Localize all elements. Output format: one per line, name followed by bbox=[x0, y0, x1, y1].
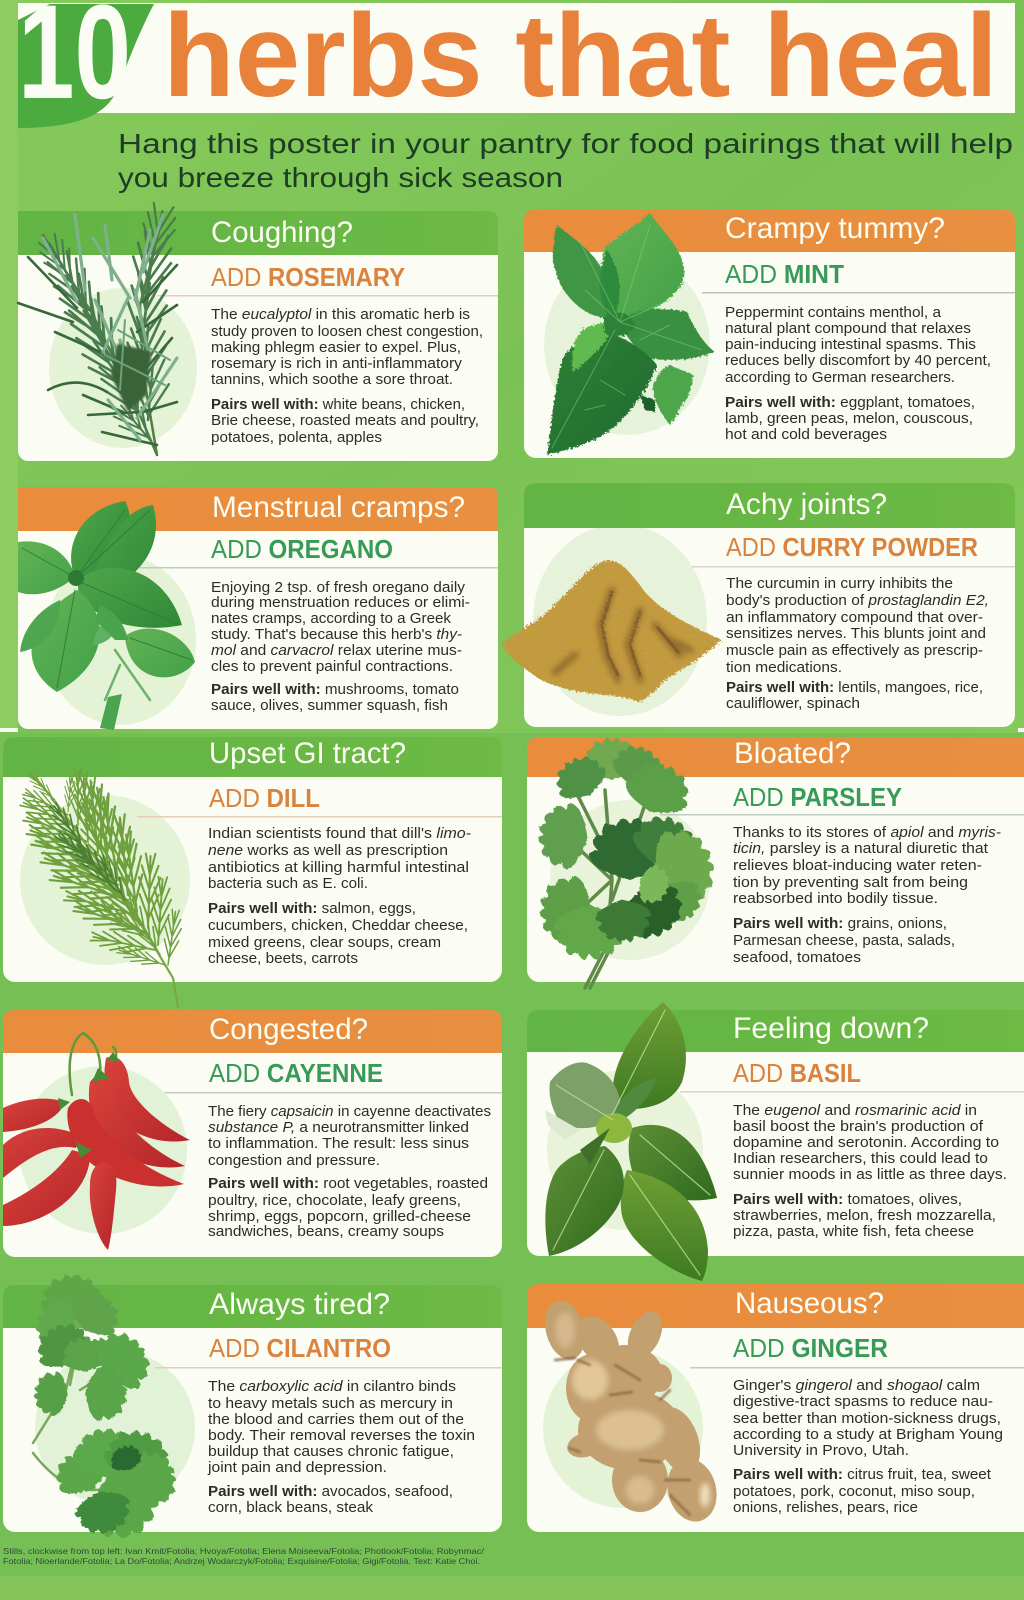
heading: Achy joints? bbox=[726, 488, 887, 521]
header bar bbox=[18, 211, 498, 255]
text block bbox=[733, 825, 1001, 966]
text block: mixed greens, clear soups, cream bbox=[208, 935, 441, 951]
text block: seafood, tomatoes bbox=[733, 950, 861, 966]
text block: making phlegm easier to expel. Plus, bbox=[211, 340, 461, 356]
remedy name: ADD CAYENNE bbox=[209, 1058, 383, 1088]
text block bbox=[733, 1378, 1003, 1516]
text block: cles to prevent painful contractions. bbox=[211, 659, 453, 675]
text block: University in Provo, Utah. bbox=[733, 1443, 909, 1459]
text block bbox=[208, 826, 471, 967]
text block: The curcumin in curry inhibits the bbox=[726, 576, 953, 592]
text block: cauliflower, spinach bbox=[726, 696, 860, 712]
herb image: basil bbox=[545, 1002, 717, 1281]
text block: congestion and pressure. bbox=[208, 1153, 380, 1169]
text block: Parmesan cheese, pasta, salads, bbox=[733, 933, 955, 949]
herb image: curry powder bbox=[502, 561, 722, 702]
text block: reduces belly discomfort by 40 percent, bbox=[725, 353, 991, 369]
header bar bbox=[18, 487, 498, 531]
header bar bbox=[527, 737, 1024, 777]
text block: Enjoying 2 tsp. of fresh oregano daily bbox=[211, 580, 466, 596]
text block: study. That's because this herb's thy- bbox=[211, 627, 462, 643]
text block: the blood and carries them out of the bbox=[208, 1412, 464, 1428]
text block: mol and carvacrol relax uterine mus- bbox=[211, 643, 462, 659]
text block: pain-inducing intestinal spasms. This bbox=[725, 337, 976, 353]
text block: body's production of prostaglandin E2, bbox=[726, 593, 989, 609]
panel: always tired cilantro bbox=[3, 1275, 502, 1550]
text block: ticin, parsley is a natural diuretic that bbox=[733, 841, 988, 857]
panel: achy joints curry powder bbox=[502, 483, 1015, 727]
text block: corn, black beans, steak bbox=[208, 1500, 374, 1516]
text block: buildup that causes chronic fatigue, bbox=[208, 1444, 454, 1460]
text block: Pairs well with: eggplant, tomatoes, bbox=[725, 395, 975, 411]
text block: Pairs well with: lentils, mangoes, rice, bbox=[726, 680, 983, 696]
panel: feeling down basil bbox=[527, 1002, 1024, 1281]
text block: tion by preventing salt from being bbox=[733, 875, 968, 891]
text block: Pairs well with: tomatoes, olives, bbox=[733, 1192, 962, 1208]
text block: Pairs well with: grains, onions, bbox=[733, 916, 947, 932]
header bar bbox=[524, 483, 1015, 528]
text block: tion medications. bbox=[726, 660, 842, 676]
subtitle bbox=[118, 128, 1013, 193]
text block: according to a study at Brigham Young bbox=[733, 1427, 1003, 1443]
remedy name: ADD BASIL bbox=[733, 1058, 861, 1088]
text block: substance P, a neurotransmitter linked bbox=[208, 1120, 469, 1136]
text block: study proven to loosen chest congestion, bbox=[211, 324, 483, 340]
text block: tannins, which soothe a sore throat. bbox=[211, 372, 453, 388]
text block: The eugenol and rosmarinic acid in bbox=[733, 1103, 977, 1119]
text block bbox=[207, 1379, 475, 1516]
text block: Pairs well with: root vegetables, roasted bbox=[208, 1176, 488, 1192]
remedy name: ADD ROSEMARY bbox=[211, 262, 405, 292]
text block: bacteria such as E. coli. bbox=[208, 876, 368, 892]
text block bbox=[725, 305, 991, 443]
header bar bbox=[527, 1284, 1024, 1328]
remedy name: ADD CURRY POWDER bbox=[726, 532, 978, 562]
heading: Feeling down? bbox=[733, 1012, 929, 1045]
text block bbox=[211, 580, 470, 714]
herb image: cayenne peppers bbox=[3, 1033, 190, 1250]
text block: joint pain and depression. bbox=[207, 1460, 387, 1476]
panel: bloated parsley bbox=[527, 737, 1024, 988]
remedy name: ADD OREGANO bbox=[211, 534, 393, 564]
text block: Pairs well with: salmon, eggs, bbox=[208, 901, 416, 917]
text block: onions, relishes, pears, rice bbox=[733, 1500, 918, 1516]
panel: upset GI tract dill bbox=[3, 737, 502, 1007]
photo credits: Fotolia; Nioerlande/Fotolia; La Do/Fotolia; Andrzej Wodarczyk/Fotolia; Exquisine/Fotolia; Gigi/Fotolia. Text: Katie Choi. bbox=[3, 1556, 480, 1566]
text block: Pairs well with: mushrooms, tomato bbox=[211, 682, 459, 698]
heading: Congested? bbox=[209, 1013, 368, 1046]
text block: to heavy metals such as mercury in bbox=[208, 1396, 453, 1412]
text block: antibiotics at killing harmful intestinal bbox=[208, 860, 469, 876]
herb image: oregano bbox=[18, 501, 195, 730]
text block: during menstruation reduces or elimi- bbox=[211, 595, 470, 611]
panel: coughing rosemary bbox=[18, 202, 498, 461]
text block bbox=[726, 576, 989, 712]
text block: Indian scientists found that dill's limo- bbox=[208, 826, 471, 842]
text block: relieves bloat-inducing water reten- bbox=[733, 858, 982, 874]
text block: natural plant compound that relaxes bbox=[725, 321, 971, 337]
header bar bbox=[3, 1010, 502, 1053]
text block: lamb, green peas, melon, couscous, bbox=[725, 411, 973, 427]
text block: potatoes, pork, coconut, miso soup, bbox=[733, 1484, 975, 1500]
panel: nauseous ginger bbox=[527, 1284, 1024, 1532]
herb image: cilantro bbox=[28, 1275, 181, 1550]
text block bbox=[733, 1103, 1007, 1240]
heading: Coughing? bbox=[211, 216, 353, 249]
text block bbox=[208, 1104, 491, 1240]
header bar bbox=[3, 737, 502, 777]
herb image: dill bbox=[18, 769, 184, 1007]
text block: potatoes, polenta, apples bbox=[211, 430, 382, 446]
text block: sunnier moods in as little as three days. bbox=[733, 1167, 1007, 1183]
remedy name: ADD MINT bbox=[725, 259, 844, 289]
text block: Pairs well with: white beans, chicken, bbox=[211, 397, 465, 413]
subtitle: Hang this poster in your pantry for food pairings that will help bbox=[118, 128, 1013, 159]
text block: dopamine and serotonin. According to bbox=[733, 1135, 999, 1151]
text block: sensitizes nerves. This blunts joint and bbox=[726, 626, 986, 642]
herb image: rosemary bbox=[18, 202, 179, 455]
text block: Brie cheese, roasted meats and poultry, bbox=[211, 413, 479, 429]
text block: muscle pain as effectively as prescrip- bbox=[726, 643, 983, 659]
panel: crampy tummy mint bbox=[524, 209, 1015, 458]
text block: nates cramps, according to a Greek bbox=[211, 611, 452, 627]
heading: Bloated? bbox=[734, 737, 851, 770]
panel: menstrual cramps oregano bbox=[18, 487, 498, 730]
text block: shrimp, eggs, popcorn, grilled-cheese bbox=[208, 1209, 471, 1225]
text block: strawberries, melon, fresh mozzarella, bbox=[733, 1208, 996, 1224]
herb image: parsley bbox=[536, 738, 723, 988]
text block: pizza, pasta, white fish, feta cheese bbox=[733, 1224, 974, 1240]
header bar bbox=[527, 1010, 1024, 1052]
herb image: mint bbox=[547, 213, 715, 455]
text block: cucumbers, chicken, Cheddar cheese, bbox=[208, 918, 468, 934]
heading: Nauseous? bbox=[735, 1287, 884, 1320]
text block: basil boost the brain's production of bbox=[733, 1119, 984, 1135]
remedy name: ADD DILL bbox=[209, 783, 320, 813]
text block: cheese, beets, carrots bbox=[208, 951, 358, 967]
photo credits: Stills, clockwise from top left: Ivan Kmit/Fotolia; Hvoya/Fotolia; Elena Moiseeva/Fotolia; Photlook/Fotolia; Robynmac/ bbox=[3, 1546, 485, 1556]
text block: sauce, olives, summer squash, fish bbox=[211, 698, 448, 714]
text block: Indian researchers, this could lead to bbox=[733, 1151, 988, 1167]
text block: hot and cold beverages bbox=[725, 427, 887, 443]
heading: Menstrual cramps? bbox=[212, 491, 465, 524]
panel: congested cayenne bbox=[3, 1010, 502, 1257]
text block: an inflammatory compound that over- bbox=[726, 610, 983, 626]
heading: Always tired? bbox=[209, 1288, 390, 1321]
text block: body. Their removal reverses the toxin bbox=[208, 1428, 475, 1444]
text block: Thanks to its stores of apiol and myris- bbox=[733, 825, 1001, 841]
text block: nene works as well as prescription bbox=[208, 843, 448, 859]
remedy name: ADD GINGER bbox=[733, 1333, 888, 1363]
text block bbox=[211, 307, 483, 446]
text block: sea better than motion-sickness drugs, bbox=[733, 1411, 1001, 1427]
remedy name: ADD PARSLEY bbox=[733, 782, 902, 812]
text block: Peppermint contains menthol, a bbox=[725, 305, 942, 321]
text block: The carboxylic acid in cilantro binds bbox=[208, 1379, 456, 1395]
text block: digestive-tract spasms to reduce nau- bbox=[733, 1394, 993, 1410]
subtitle: you breeze through sick season bbox=[118, 162, 563, 193]
remedy name: ADD CILANTRO bbox=[209, 1333, 391, 1363]
icon: green leaf behind number bbox=[18, 4, 154, 128]
herb image: ginger bbox=[539, 1296, 723, 1527]
text block: Pairs well with: citrus fruit, tea, sweet bbox=[733, 1467, 991, 1483]
heading: Upset GI tract? bbox=[209, 737, 406, 770]
heading: Crampy tummy? bbox=[725, 212, 945, 245]
title banner bbox=[18, 0, 1015, 128]
text block: Ginger's gingerol and shogaol calm bbox=[733, 1378, 980, 1394]
text block: reabsorbed into bodily tissue. bbox=[733, 891, 938, 907]
text block: sandwiches, beans, creamy soups bbox=[208, 1224, 444, 1240]
text block: The eucalyptol in this aromatic herb is bbox=[211, 307, 470, 323]
photo credits bbox=[3, 1546, 485, 1566]
header bar bbox=[524, 209, 1015, 252]
text block: to inflammation. The result: less sinus bbox=[208, 1136, 469, 1152]
text block: according to German researchers. bbox=[725, 370, 955, 386]
header bar bbox=[3, 1285, 502, 1328]
text block: The fiery capsaicin in cayenne deactivates bbox=[208, 1104, 491, 1120]
text block: rosemary is rich in anti-inflammatory bbox=[211, 356, 463, 372]
text block: poultry, rice, chocolate, leafy greens, bbox=[208, 1193, 461, 1209]
text block: Pairs well with: avocados, seafood, bbox=[208, 1484, 453, 1500]
